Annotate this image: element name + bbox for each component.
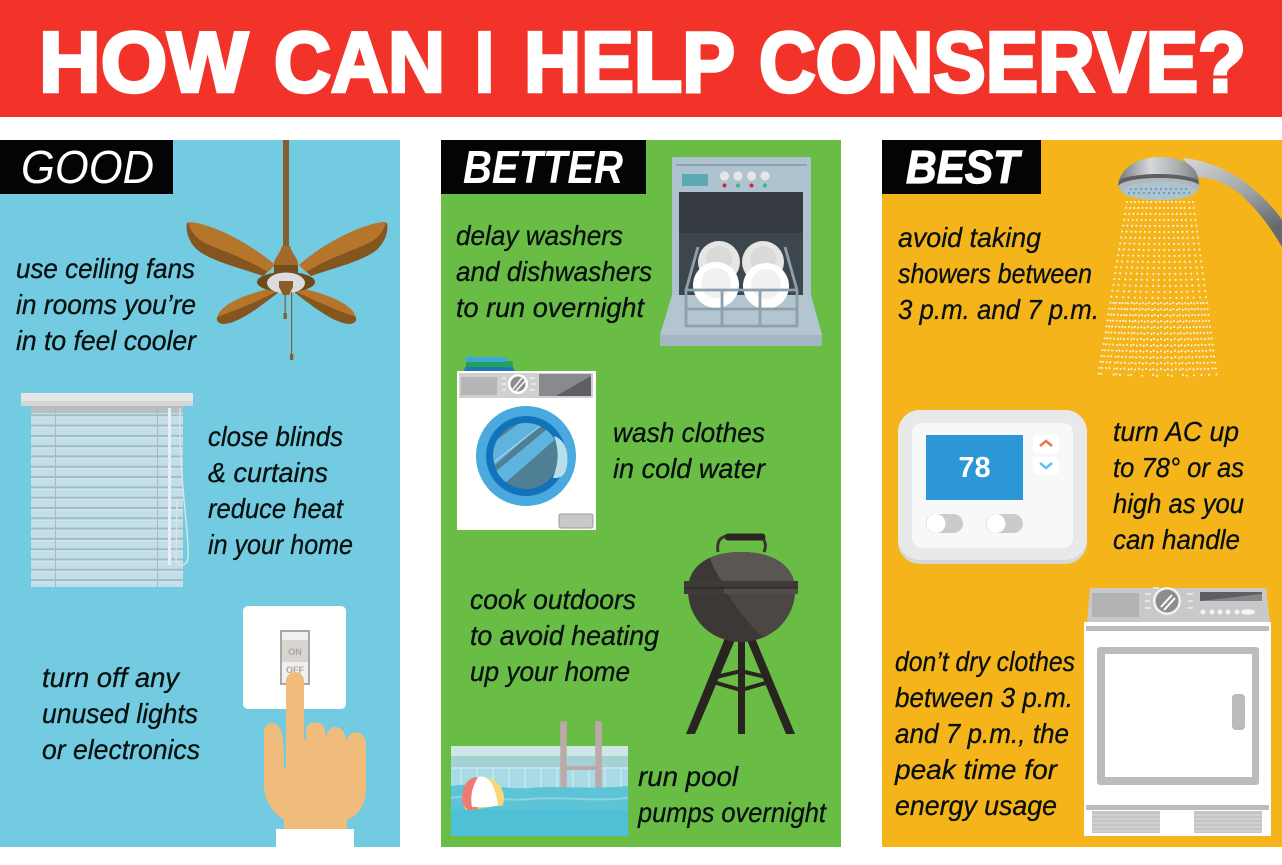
icon: swimming pool	[451, 722, 628, 836]
icon: kettle grill	[684, 535, 800, 734]
icon: window blinds	[21, 393, 193, 587]
icon: ceiling fan	[187, 140, 387, 360]
text: close blinds: & curtains	[208, 457, 328, 488]
icon: clothes dryer	[1084, 587, 1271, 836]
text: cold water	[613, 417, 767, 484]
icon: light switch and hand	[243, 606, 366, 847]
panel: best	[882, 140, 1282, 847]
icon: thermostat: 78	[958, 452, 991, 484]
text: delay washers: to run overnight	[456, 292, 645, 323]
text: dryer: and 7 p.m., the	[895, 718, 1069, 749]
text: close blinds: in your home	[208, 529, 353, 560]
heading: good: GOOD	[21, 141, 154, 193]
text: cook outdoors: up your home	[470, 656, 630, 687]
text: dryer: peak time for	[894, 754, 1059, 785]
text: turn off: unused lights	[42, 698, 198, 729]
text: cold water: in cold water	[613, 453, 767, 484]
text: pool pumps: pumps overnight	[637, 797, 827, 828]
text: showers: avoid taking	[898, 222, 1041, 253]
title banner: HELP	[524, 16, 735, 110]
text: turn off: or electronics	[42, 734, 200, 765]
text: AC thermostat: to 78° or as	[1113, 452, 1244, 483]
text: delay washers: and dishwashers	[456, 256, 652, 287]
heading: best: BEST	[906, 141, 1023, 193]
text: pool pumps: run pool	[638, 761, 739, 792]
panel: good	[0, 140, 400, 847]
title banner: I	[475, 16, 494, 110]
title banner: HOW	[39, 16, 249, 110]
text: dryer: don’t dry clothes	[895, 646, 1075, 677]
text: ceiling fans: in to feel cooler	[16, 325, 198, 356]
text: close blinds: close blinds	[208, 421, 343, 452]
icon: washing machine	[457, 357, 596, 530]
text: showers	[898, 222, 1099, 325]
icon: light switch and hand: OFF	[286, 665, 304, 675]
text: cook outdoors: to avoid heating	[470, 620, 659, 651]
icon: dishwasher	[660, 157, 822, 346]
text: cold water: wash clothes	[613, 417, 765, 448]
heading: better: BETTER	[463, 141, 623, 193]
text: dryer: between 3 p.m.	[895, 682, 1073, 713]
text: showers: 3 p.m. and 7 p.m.	[898, 294, 1099, 325]
text: delay washers	[456, 220, 652, 323]
text: delay washers: delay washers	[456, 220, 623, 251]
icon: thermostat	[898, 410, 1087, 564]
text: close blinds	[208, 421, 353, 560]
icon: light switch and hand: ON	[288, 647, 302, 657]
text: AC thermostat: turn AC up	[1113, 416, 1239, 447]
title banner	[0, 0, 1282, 117]
text: dryer: energy usage	[895, 790, 1057, 821]
text: turn off: turn off any	[42, 662, 181, 693]
icon: shower head	[1098, 157, 1282, 381]
text: cook outdoors: cook outdoors	[470, 584, 636, 615]
text: dryer	[894, 646, 1075, 821]
text: pool pumps	[637, 761, 827, 828]
text: ceiling fans: in rooms you’re	[16, 289, 196, 320]
text: ceiling fans: use ceiling fans	[16, 253, 195, 284]
text: cook outdoors	[470, 584, 659, 687]
text: AC thermostat	[1113, 416, 1244, 555]
text: AC thermostat: high as you	[1113, 488, 1244, 519]
text: AC thermostat: can handle	[1113, 524, 1240, 555]
text: close blinds: reduce heat	[208, 493, 344, 524]
title banner: CONSERVE?	[759, 16, 1246, 110]
text: showers: showers between	[898, 258, 1092, 289]
text: ceiling fans	[16, 253, 198, 356]
text: turn off	[42, 662, 200, 765]
title banner: CAN	[274, 16, 445, 110]
panel: better	[441, 140, 841, 847]
